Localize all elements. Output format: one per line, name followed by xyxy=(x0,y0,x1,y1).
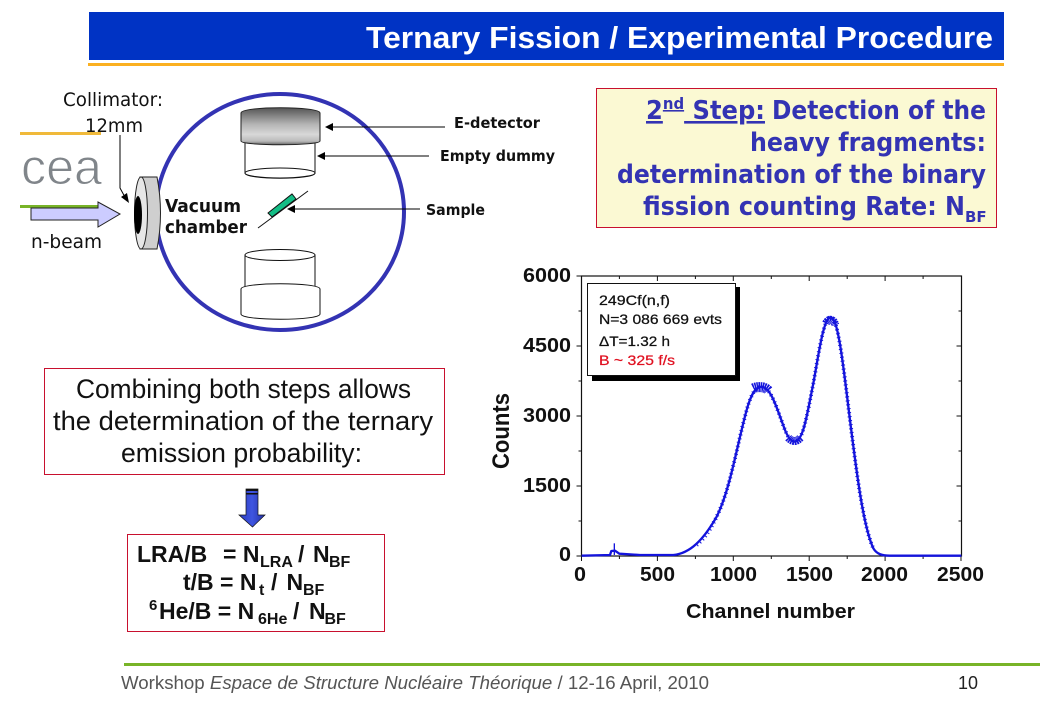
logo: cea: cea xyxy=(21,139,102,195)
sample xyxy=(258,191,308,228)
label: E-detector xyxy=(325,114,540,132)
label: Sample: Sample xyxy=(426,201,485,219)
y tick labels: 0 xyxy=(559,544,571,566)
label: Empty dummy xyxy=(317,147,555,165)
x tick labels: 1000 xyxy=(710,564,757,586)
arrow: down xyxy=(239,489,265,527)
callout: second step: BF xyxy=(965,208,987,226)
arrow: n-beam xyxy=(31,202,120,227)
formulas: BF xyxy=(329,554,351,571)
callout: second step: 2 xyxy=(646,94,765,126)
x tick labels: 1500 xyxy=(786,564,833,586)
vacuum chamber xyxy=(156,94,404,330)
callout: combining both steps: emission probability: xyxy=(121,438,362,468)
x tick labels: 2000 xyxy=(861,564,908,586)
y tick labels: 1500 xyxy=(523,475,571,497)
collimator xyxy=(134,177,160,249)
E-detector xyxy=(241,108,320,145)
callout: second step: fission counting Rate: N xyxy=(643,192,965,222)
x tick labels: 0 xyxy=(574,564,586,586)
collimator label xyxy=(63,89,163,137)
formulas: LRA/B xyxy=(137,541,207,567)
legend box: N=3 086 669 evts xyxy=(599,311,722,327)
formulas: N xyxy=(309,598,326,624)
label: E-detector: E-detector xyxy=(454,114,540,132)
y tick labels xyxy=(523,265,571,566)
footer: Workshop Espace de Structure Nucléaire Théorique / 12-16 April, 2010 xyxy=(121,673,709,693)
formulas: t xyxy=(259,582,265,599)
empty dummy top xyxy=(245,140,315,178)
footer xyxy=(121,663,1040,693)
footer: 10 xyxy=(958,673,978,693)
callout: combining both steps: Combining both steps allows xyxy=(76,374,411,404)
callout: second step: determination of the binary xyxy=(617,160,986,190)
y tick labels: 6000 xyxy=(523,265,571,287)
x tick labels xyxy=(574,564,984,586)
legend box: 249Cf(n,f) xyxy=(599,292,670,308)
callout: combining both steps: the determination of the ternary xyxy=(53,406,434,436)
legend box xyxy=(588,284,740,381)
legend box: B ~ 325 f/s xyxy=(599,352,675,368)
y tick labels: 3000 xyxy=(523,405,571,427)
n-beam label: n-beam xyxy=(31,231,102,253)
title bar: Ternary Fission / Experimental Procedure xyxy=(366,20,993,55)
x tick labels: 2500 xyxy=(937,564,984,586)
formulas: / xyxy=(271,569,278,595)
label: Sample xyxy=(287,201,485,219)
detector bottom xyxy=(241,284,320,319)
formulas: BF xyxy=(303,582,325,599)
y axis title: Counts xyxy=(488,393,515,469)
formulas: N xyxy=(286,569,303,595)
formulas: t/B = N xyxy=(183,569,256,595)
vacuum chamber label: chamber xyxy=(165,217,247,238)
formulas xyxy=(128,534,384,632)
callout: combining both steps xyxy=(44,368,444,474)
callout: second step: Detection of the xyxy=(772,96,986,126)
empty dummy bottom xyxy=(245,250,315,288)
collimator label: Collimator: xyxy=(63,89,163,111)
y tick labels: 4500 xyxy=(523,335,571,357)
formulas: LRA xyxy=(260,554,293,571)
callout: second step: nd xyxy=(663,94,684,113)
chart: binary fission spectrum xyxy=(488,265,984,623)
formulas: He/B = N xyxy=(159,598,254,624)
formulas: 6 xyxy=(149,597,157,614)
label: Empty dummy: Empty dummy xyxy=(440,147,555,165)
x tick labels: 500 xyxy=(640,564,675,586)
formulas: = N xyxy=(223,541,259,567)
formulas: / xyxy=(298,541,305,567)
formulas: 6He xyxy=(258,611,287,628)
callout: second step: heavy fragments: xyxy=(750,128,986,158)
formulas: BF xyxy=(324,611,346,628)
collimator label: 12mm xyxy=(85,115,143,137)
vacuum chamber label xyxy=(165,196,247,238)
x axis title: Channel number xyxy=(686,601,855,623)
title bar xyxy=(88,12,1004,66)
formulas: N xyxy=(313,541,330,567)
callout: second step xyxy=(596,88,996,228)
vacuum chamber label: Vacuum xyxy=(165,196,241,217)
arrow: collimator pointer xyxy=(120,135,129,203)
callout: second step: Step: xyxy=(684,96,765,126)
curve xyxy=(582,317,961,556)
formulas: / xyxy=(293,598,300,624)
legend box: ΔT=1.32 h xyxy=(599,333,670,349)
